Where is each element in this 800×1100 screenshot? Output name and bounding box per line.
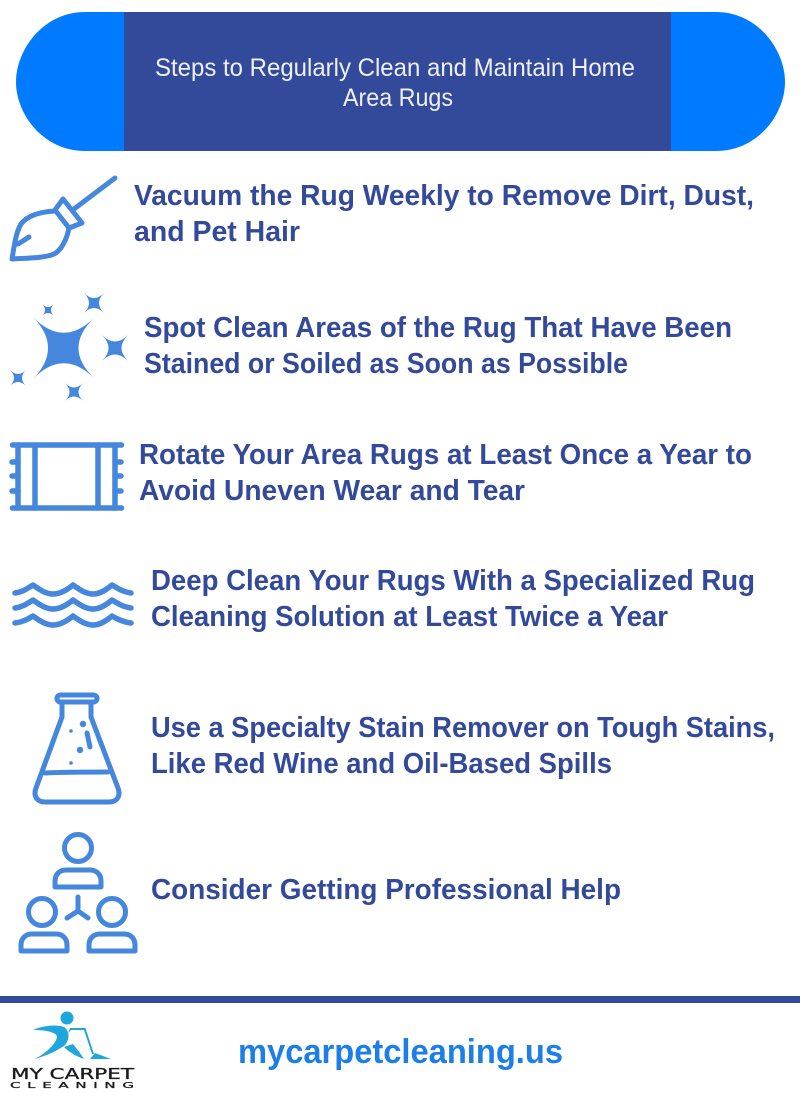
step 1 text: Vacuum the Rug Weekly to Remove Dirt, Dust, (134, 180, 754, 212)
step 3 text: Rotate Your Area Rugs at Least Once a Year to (139, 439, 752, 471)
step 5 text (151, 712, 775, 780)
step 1 text: and Pet Hair (134, 216, 300, 248)
icon: rug (12, 445, 122, 508)
logo wordmark: CLEANING (10, 1081, 134, 1090)
step 4 text (151, 565, 755, 633)
title (155, 54, 635, 112)
logo figure (33, 1012, 111, 1059)
website url: mycarpetcleaning.us (238, 1033, 563, 1071)
icon: waves (15, 585, 131, 625)
icon: sparkles (10, 293, 128, 401)
step 4 text: Cleaning Solution at Least Twice a Year (151, 601, 668, 633)
logo wordmark: MY CARPET (11, 1065, 135, 1083)
step 3 text (139, 439, 752, 507)
step 2 text: Stained or Soiled as Soon as Possible (144, 348, 628, 380)
step 5 text: Like Red Wine and Oil-Based Spills (151, 748, 612, 780)
step 5 text: Use a Specialty Stain Remover on Tough Stains, (151, 712, 775, 744)
icon: broom (12, 178, 115, 259)
title: Area Rugs (343, 84, 453, 112)
step 2 text (144, 312, 732, 380)
step 6 text: Consider Getting Professional Help (151, 874, 621, 906)
step 1 text (134, 180, 754, 248)
step 4 text: Deep Clean Your Rugs With a Specialized Rug (151, 565, 755, 597)
icon: flask (35, 695, 119, 802)
title: Steps to Regularly Clean and Maintain Home (155, 54, 635, 82)
step 2 text: Spot Clean Areas of the Rug That Have Been (144, 312, 732, 344)
logo wordmark (10, 1065, 135, 1090)
header banner (16, 12, 785, 151)
footer divider (0, 996, 800, 1003)
logo (10, 1012, 135, 1090)
step 3 text: Avoid Uneven Wear and Tear (139, 475, 525, 507)
icon: people (21, 834, 135, 951)
